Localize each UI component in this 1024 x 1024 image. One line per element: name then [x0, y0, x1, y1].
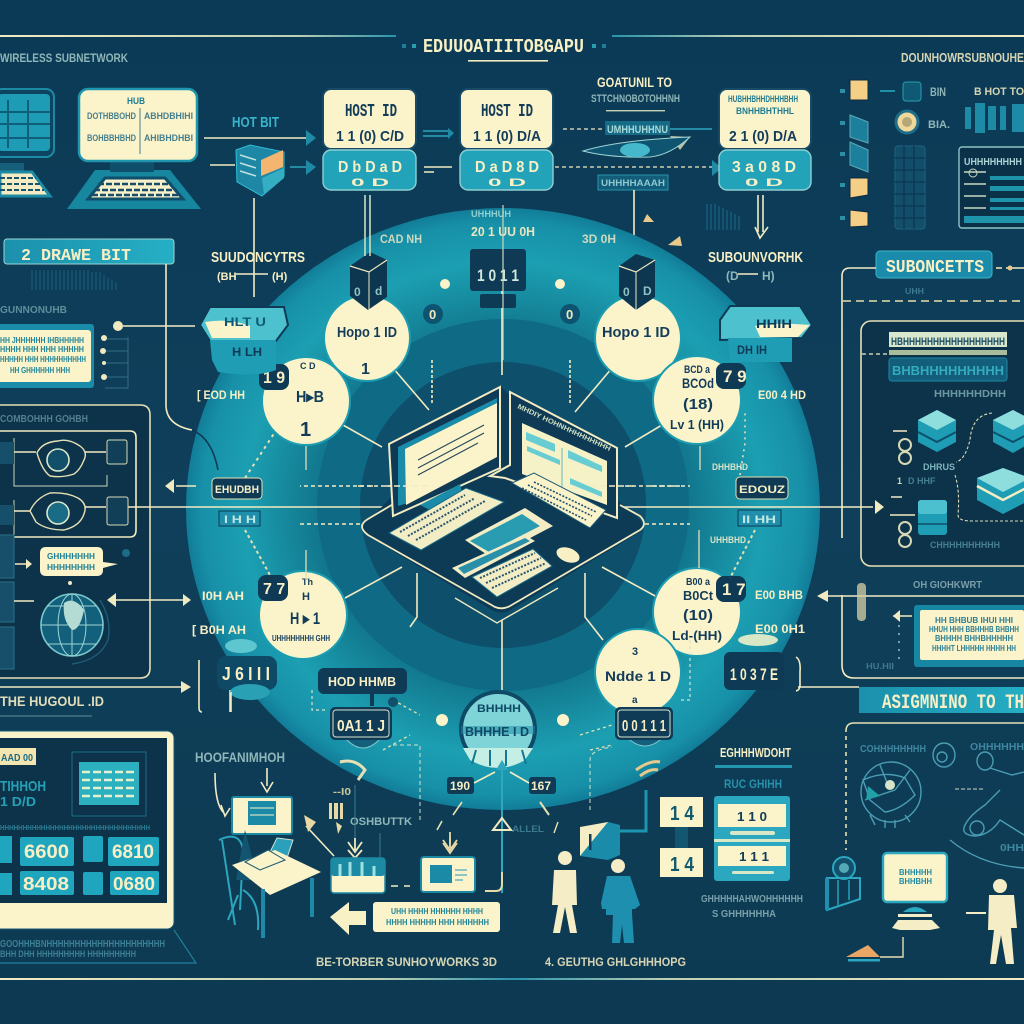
label: subnet device and arrows: --I0: [333, 787, 352, 798]
callout: left text box: HHHH HHH HHH HHHHH: [0, 345, 84, 354]
panel: segment table: EGHHHWDOHT: [720, 745, 791, 760]
column of small cards: [0, 535, 14, 669]
icon: lens pillar: [827, 857, 860, 910]
icon: cube 3: [977, 468, 1024, 514]
connector and label: subnet left: (BH: [217, 271, 237, 283]
device: right upper switch: [720, 306, 812, 362]
chip: right mid: DHHBHD: [712, 462, 748, 472]
callout: left text box: HHHHH HHH HHHHHHHHHH: [0, 355, 86, 364]
panel: bottom-left laptop: GOOHHHBNHHHHHHHHHHHHHHHHHHHHH: [0, 939, 165, 950]
panel: host ID box 2: HOST ID: [481, 102, 533, 122]
panel: host ID box 2: 0 D: [488, 177, 526, 189]
node: lower-left circle: Th: [302, 577, 313, 587]
bottom caption middle: 4. GEUTHG GHLGHHHOPG: [545, 955, 686, 969]
arrow down and label: subnetwork: (D: [726, 269, 739, 283]
label pill: assigning: [796, 657, 1024, 715]
callout: right text box: [914, 605, 1024, 667]
small tags below lens: 190: [450, 779, 470, 793]
panel: host ID box 2: D a D 8 D: [475, 159, 539, 176]
label: host administration: HOOFANIMHOH: [195, 749, 285, 765]
router connector graphic: UMHHUHHNU: [607, 124, 668, 136]
small tags below lens: ALLEL: [512, 824, 545, 834]
panel: bottom-left laptop: 0680: [113, 874, 155, 894]
panel: left network diagram: COMBOHHH GOHBH: [0, 414, 88, 425]
node: lower-right circle: [653, 568, 741, 656]
chip: right mid: UHHBHD: [710, 535, 746, 545]
panel: subnet diagram: D HHF: [908, 476, 936, 486]
top centre hub: UHHHUH: [471, 209, 511, 219]
panel: lower-right globe and map: COHHHHHHHH: [860, 744, 926, 755]
callout: speech bubble: GHHHHHHH: [47, 552, 95, 561]
node: bottom lens: [461, 692, 535, 768]
device: lower-left: J 6 I I I: [222, 664, 270, 684]
node: lower-right circle: Ld-(HH): [672, 628, 722, 643]
panel: host ID box 1: D b D a D: [338, 159, 402, 176]
router connector graphic: [555, 121, 722, 256]
left panel pill: drawe bit: [0, 239, 218, 470]
panel: bottom-left laptop: 8408: [23, 874, 69, 894]
person: teal: [601, 859, 640, 943]
callout: left text box: HH GHHHHHH HHH: [10, 366, 70, 375]
panel: host ID box 3: 3 a 0 8 D: [732, 159, 796, 176]
panel: host ID box 1: 0 D: [351, 177, 389, 189]
coin and small labels: [896, 85, 1024, 133]
icon: monitor with table: [67, 89, 201, 209]
node: bottom-right circle: [595, 629, 681, 715]
icon: cloud lens 2: [0, 442, 128, 530]
frame: subnet lower right: HU.HII: [866, 662, 894, 671]
device: right upper switch: DH IH: [737, 343, 767, 357]
panel: subnet diagram: HHHHHHDHH: [934, 389, 1006, 400]
label: subnet device and arrows: [304, 785, 412, 858]
panel: bottom-left laptop: 1 D/D: [0, 794, 36, 809]
label pill: subnets right: SUBONCETTS: [886, 258, 984, 278]
top centre hub: 0: [566, 307, 573, 322]
icon: monitor with table: ABHDBHIHI: [144, 111, 193, 121]
tag: lower-right node number: E00 BHB: [755, 588, 803, 602]
panel: host ID box 1: [323, 89, 416, 190]
callout: left text box: [0, 324, 128, 388]
panel: segment table: 1 1 0: [737, 809, 767, 824]
person: lower right: [966, 879, 1017, 964]
top centre hub: 20 1 UU 0H: [471, 224, 535, 239]
panel: bottom-left laptop: HHHHHHHHHHHHHHHHHHHHHHHHHHHHHHHHH: [0, 825, 150, 832]
panel: segment table: S GHHHHHHA: [712, 909, 776, 920]
panel: host ID box 1: HOST ID: [345, 102, 397, 122]
icon: top-right tower: [582, 232, 655, 310]
node: lower-right circle: B00 a: [686, 577, 710, 588]
icon: lower-right monitor: BHHBHH: [899, 877, 932, 886]
node: top-left circle: [324, 295, 410, 381]
arrow down and label: subnetwork: H): [762, 269, 775, 283]
label: host bit: HOT BIT: [232, 114, 279, 131]
panel: subnet diagram: [861, 321, 1024, 566]
node: lower-left circle: [259, 571, 347, 659]
node: top-right circle: Hopo 1 ID: [602, 324, 670, 341]
panel: segment table: 1 4: [670, 854, 695, 876]
left panel pill: drawe bit: GUNNONUHB: [0, 305, 67, 316]
label pill: subnets right: [876, 251, 1024, 278]
panel: subnet diagram: CHHHHHHHHHH: [930, 540, 1000, 550]
tag: right node number: [716, 363, 806, 402]
connector: bottom centre arrow: [485, 760, 511, 893]
top-left caption: WIRELESS SUBNETWORK: [0, 51, 128, 65]
small tags below lens: 167: [531, 779, 551, 793]
centre platform with laptops: [362, 386, 644, 623]
icon: top-right tower: 3D 0H: [582, 232, 616, 246]
panel: segment table: RUC GHIHH: [724, 777, 782, 791]
router connector graphic: UHHHHAAAH: [601, 178, 665, 188]
node: lower-left circle: H ▸ 1: [290, 609, 320, 628]
node: lower-right circle: (10): [683, 607, 713, 624]
right monitor: MHDIY HOHNHHHHHHHHH: [516, 403, 612, 453]
panel: right table: [959, 147, 1024, 228]
icon: lower-right monitor: BHHHHH: [899, 868, 932, 877]
icon: partial monitor: [0, 89, 54, 196]
frame: subnet right: [842, 268, 1024, 538]
arrow and callout: bottom middle: HHHH HHHHH HHH HHHHHH: [386, 918, 489, 927]
title: EDUUOATIITOBGAPU: [423, 36, 584, 58]
chip: right mid: II HH: [742, 514, 776, 526]
panel: host ID box 2: 1 1 (0) D/A: [473, 128, 541, 145]
tag: lower-left node number: [192, 575, 288, 637]
chip: left mid: EHUDBH: [215, 484, 259, 496]
icon: device box: [331, 858, 410, 893]
icon: monitor with table: AHIBHDHBI: [144, 133, 193, 143]
frame: subnet right: UHH: [905, 287, 924, 296]
icon: book box: [580, 790, 646, 860]
arrow and callout: bottom middle: [330, 902, 500, 935]
panel: bottom-left laptop: [0, 731, 196, 963]
arrow and callout: bottom middle: UHH HHHH HHHHHH HHHH: [391, 907, 483, 916]
frame: subnet lower right: [817, 580, 1024, 678]
tag: left node number: 1 9: [263, 368, 285, 387]
panel: lower-right globe and map: OHHHHHH: [970, 742, 1024, 753]
bottom-left section title: THE HUGOUL .ID: [0, 693, 104, 709]
icon: top-left tower: [350, 195, 422, 310]
icon: lower-right monitor: [846, 853, 947, 962]
node: left circle: C D: [300, 361, 316, 371]
label: continue to: [591, 74, 680, 111]
arrow between host boxes: [423, 128, 454, 172]
panel: lower-right globe and map: 0HH: [1000, 843, 1024, 854]
node: lower-left circle: H: [302, 591, 310, 603]
icon: top-left tower: CAD NH: [380, 232, 422, 246]
node: right circle: [653, 356, 741, 444]
tag: left node number: [197, 364, 289, 402]
connector and label: subnet left: SUUDONCYTRS: [211, 249, 305, 266]
tag: lower-right node number: E00 0H1: [755, 622, 805, 636]
coin and small labels: BIN: [930, 85, 946, 99]
bottom caption left: BE-TORBER SUNHOYWORKS 3D: [316, 955, 497, 969]
tag: right node number: E00 4 HD: [758, 388, 806, 402]
tag: host name: [318, 668, 407, 694]
panel: lower-right globe and map: [846, 723, 1024, 868]
panel: left network diagram: [0, 405, 150, 678]
node: top-left circle: 1: [361, 361, 370, 378]
node: right circle: BCD a: [684, 364, 711, 376]
tag: lower-right node number: [716, 576, 805, 636]
icon: cube 4: [918, 500, 947, 535]
callout: speech bubble: [40, 547, 118, 576]
callout: left text box: HH JHHHHHH IHBHHHHH: [0, 336, 84, 345]
small tags below lens: [437, 772, 558, 850]
chip: left mid: [212, 432, 306, 580]
tag: lower-left node number: [ B0H AH: [192, 623, 246, 637]
callout: speech bubble: HHHHHHHH: [47, 563, 95, 572]
arrow down and label: subnetwork: SUBOUNVORHK: [708, 249, 803, 266]
icon: monitor with table: DOTHBBOHD: [87, 111, 136, 121]
top centre hub: [423, 205, 580, 360]
panel: host ID box 3: 0 D: [745, 177, 783, 189]
node: right circle: BCOd: [682, 375, 714, 391]
main disc: [186, 208, 820, 810]
connector and label: subnet left: (H): [272, 271, 288, 283]
keyboards: [389, 488, 582, 597]
node: bottom-right circle: 3: [632, 646, 638, 658]
icon: cube 1: [918, 410, 956, 452]
person: cream: [552, 851, 577, 933]
chip: right mid: EDOUZ: [739, 484, 785, 496]
panel: bottom-left laptop: 6600: [24, 842, 69, 863]
tag: lower-left node number: 7 7: [263, 581, 285, 598]
panel: host ID box 3: [719, 89, 811, 190]
icon: cloud lens 1: [14, 440, 127, 477]
node: lower-left circle: UHHHHHHHH GHH: [272, 634, 330, 643]
icon: cube 2: [993, 410, 1024, 453]
icon: monitor with table: HUB: [127, 96, 145, 106]
panel: bottom-left laptop: AAD 00: [1, 753, 33, 764]
icon: top-left tower: d: [375, 284, 382, 298]
callout: right text box: HH BHBUB IHUI HHI: [935, 616, 1013, 625]
node: bottom lens: BHHHH: [477, 703, 521, 715]
panel: host ID box 1: 1 1 (0) C/D: [336, 128, 404, 145]
label: continue to: STTCHNOBOTOHHNH: [591, 93, 680, 105]
node: lower-right circle: B0Ct: [683, 588, 714, 603]
device: left upper switch: [200, 307, 288, 375]
panel: bottom-left laptop: 6810: [112, 842, 154, 863]
frame: subnet lower right: OH GIOHKWRT: [913, 580, 982, 591]
top centre hub: 0: [429, 307, 436, 322]
panel: host ID box 3: 2 1 (0) D/A: [729, 128, 797, 145]
double arrow: globe to disc: [107, 479, 196, 607]
panel: host ID box 3: HUBHHBHHDHHHBHH: [728, 94, 798, 104]
tag: binary right with signal icon: 0 0 1 1 1: [622, 718, 666, 735]
device: right upper switch: HHIH: [756, 317, 792, 331]
node: left circle: H▸B: [296, 389, 324, 406]
icon: top-right tower: 0: [623, 285, 630, 299]
arrows into first host box: [204, 130, 316, 175]
device: lower-right: 1 0 3 7 E: [730, 665, 778, 684]
callout: right text box: BHHHH BHHBHHHHH: [935, 634, 1013, 643]
long arrow through the centre: [128, 500, 884, 514]
label: continue to: GOATUNIL TO: [597, 74, 672, 90]
tag: host name: HOD HHMB: [328, 674, 396, 689]
connector and label: subnet left: [211, 198, 305, 297]
tag: binary right with signal icon: [557, 640, 690, 810]
left panel pill: drawe bit: 2 DRAWE BIT: [21, 247, 131, 266]
panel: segment table: 1 1 1: [739, 849, 769, 864]
panel: segment table: [660, 745, 803, 920]
panel: subnet diagram: BHBHHHHHHHHH: [892, 363, 1004, 378]
icon: screen card: [421, 838, 475, 892]
device: lower-left: [217, 639, 277, 712]
device: left upper switch: HLT U: [224, 315, 266, 329]
device: lower-right: [724, 634, 784, 690]
bottom-left section title: [0, 660, 230, 716]
icon: top-right tower: D: [643, 284, 652, 298]
chip: right mid: [699, 410, 788, 578]
left monitor: [389, 387, 500, 516]
icon: server rack: [895, 146, 925, 229]
icon: top-left tower: 0: [354, 285, 361, 299]
panel: subnet diagram: 1: [897, 476, 902, 486]
node: bottom-right circle: a: [632, 695, 638, 706]
icon: desk with laptop and chair: [215, 768, 321, 938]
arrow down and label: subnetwork: [707, 195, 803, 283]
panel: segment table: GHHHHHAHWOHHHHHH: [701, 894, 803, 905]
panel: host ID box 3: BNHHBHTHHL: [736, 106, 794, 116]
panel: subnet diagram: DHRUS: [923, 462, 955, 472]
right column icon stack: [840, 80, 921, 227]
panel: bottom-left laptop: BHH DHH HHHHHHHHH HHHHHHHHH: [0, 949, 136, 959]
node: top-right circle: [595, 295, 681, 381]
chip: left mid: I H H: [224, 514, 256, 526]
coin and small labels: BIA.: [928, 119, 950, 131]
panel: host ID box 2: [460, 89, 553, 190]
tag: right node number: 7 9: [723, 367, 747, 386]
label: subnet device and arrows: OSHBUTTK: [350, 816, 412, 828]
spokes from laptop to nodes: [300, 250, 690, 690]
panel: segment table: 1 4: [670, 803, 695, 825]
panel: bottom-left laptop: TIHHOH: [0, 778, 46, 795]
top centre hub: 1 0 1 1: [477, 266, 519, 285]
device: left upper switch: H LH: [232, 345, 262, 359]
icon: globe: [41, 594, 109, 664]
node: left circle: 1: [300, 419, 311, 441]
right monitor: [490, 392, 617, 528]
tag: left node number: [ EOD HH: [197, 388, 245, 402]
icon: monitor with table: BOHBBHBHD: [87, 133, 136, 143]
tag: binary left with signal icon: [312, 690, 448, 822]
tag: lower-left node number: I0H AH: [202, 589, 244, 603]
icon: server box: [236, 145, 284, 196]
tag: binary left with signal icon: 0A1 1 J: [337, 718, 385, 735]
node: left circle: [262, 357, 350, 445]
node: right circle: Lv 1 (HH): [670, 417, 724, 432]
node: top-left circle: Hopo 1 ID: [337, 324, 397, 341]
node: bottom lens: BHHHE I D: [465, 724, 529, 739]
node: bottom-right circle: Ndde 1 D: [605, 668, 671, 684]
node: right circle: (18): [683, 396, 713, 413]
tag: lower-right node number: 1 7: [722, 580, 746, 599]
